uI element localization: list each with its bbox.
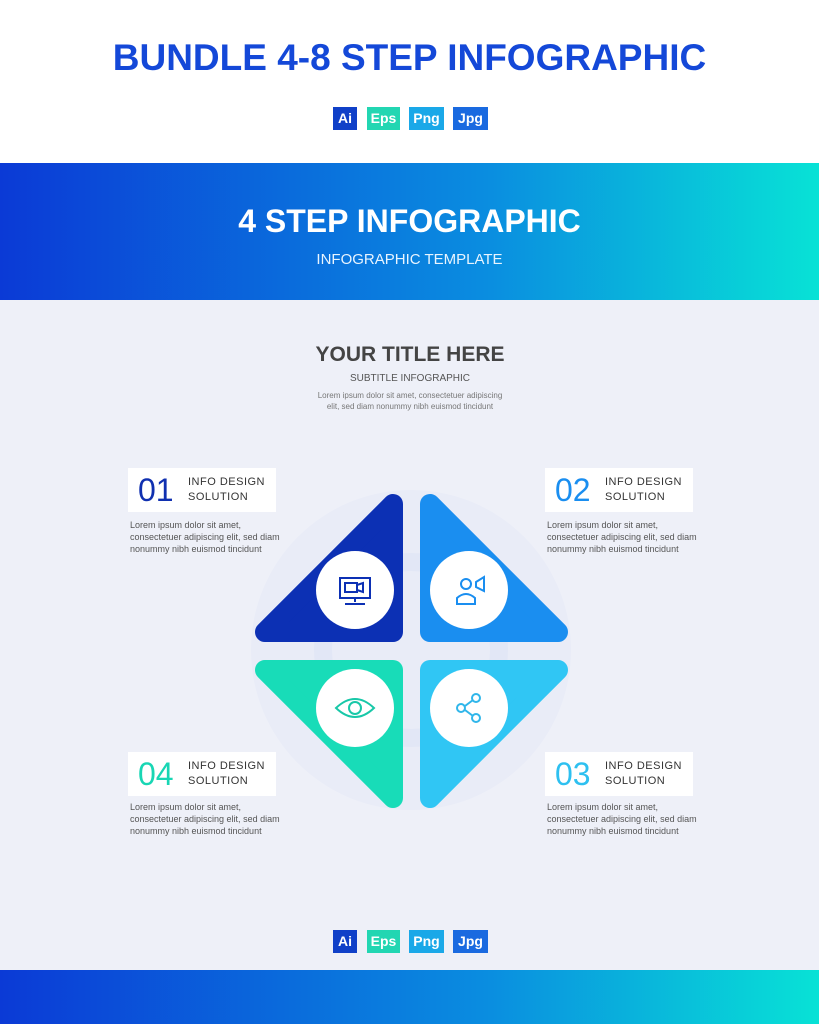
quadrant 2 top-right [430, 504, 558, 632]
section title: YOUR TITLE HERE [315, 343, 504, 366]
icon: eye [336, 699, 374, 717]
format badges bottom: Eps [371, 933, 396, 949]
step 04 card: SOLUTION [188, 775, 248, 787]
step 03 card: INFO DESIGN [605, 760, 682, 772]
format badges top: Eps [371, 110, 396, 126]
step 01 card: 01 [138, 472, 174, 508]
format badges top: Ai [338, 110, 352, 126]
quadrant 4 bottom-left [265, 669, 394, 798]
step 04 text: Lorem ipsum dolor sit amet, consectetuer adipiscing elit, sed diam nonummy nibh euismod tincidunt [130, 802, 280, 836]
format badges bottom: Jpg [458, 933, 483, 949]
banner title: 4 STEP INFOGRAPHIC [238, 203, 581, 239]
icon: share [457, 694, 480, 722]
step 02 card: SOLUTION [605, 491, 665, 503]
step 04 card: 04 [138, 756, 174, 792]
step 03 text: Lorem ipsum dolor sit amet, consectetuer adipiscing elit, sed diam nonummy nibh euismod tincidunt [547, 802, 697, 836]
section title [315, 343, 504, 411]
icon: user megaphone [457, 577, 484, 604]
format badges top [333, 107, 488, 130]
step 01 text: Lorem ipsum dolor sit amet, consectetuer adipiscing elit, sed diam nonummy nibh euismod tincidunt [130, 520, 280, 554]
format badges bottom [333, 930, 488, 953]
banner [0, 163, 819, 300]
banner subtitle: INFOGRAPHIC TEMPLATE [316, 251, 503, 268]
step 03 card: SOLUTION [605, 775, 665, 787]
step 04 card [128, 752, 276, 796]
quadrant 1 top-left [265, 504, 394, 632]
step 01 card [128, 468, 276, 512]
step 03 card [545, 752, 693, 796]
format badges bottom: Ai [338, 933, 352, 949]
format badges top: Png [413, 110, 440, 126]
section title: SUBTITLE INFOGRAPHIC [350, 373, 470, 384]
main title: BUNDLE 4-8 STEP INFOGRAPHIC [113, 37, 706, 78]
bottom band [0, 970, 819, 1024]
icon: monitor [340, 578, 370, 604]
quadrant 3 bottom-right [430, 669, 558, 798]
step 02 card: 02 [555, 472, 591, 508]
section title: Lorem ipsum dolor sit amet, consectetuer adipiscing [318, 391, 502, 400]
step 01 card: INFO DESIGN [188, 476, 265, 488]
step 03 card: 03 [555, 756, 591, 792]
top white header [0, 0, 819, 163]
step 04 card: INFO DESIGN [188, 760, 265, 772]
step 02 card [545, 468, 693, 512]
step 02 card: INFO DESIGN [605, 476, 682, 488]
step 02 text: Lorem ipsum dolor sit amet, consectetuer adipiscing elit, sed diam nonummy nibh euismod tincidunt [547, 520, 697, 554]
format badges bottom: Png [413, 933, 440, 949]
section title: elit, sed diam nonummy nibh euismod tincidunt [327, 402, 493, 411]
step 01 card: SOLUTION [188, 491, 248, 503]
format badges top: Jpg [458, 110, 483, 126]
